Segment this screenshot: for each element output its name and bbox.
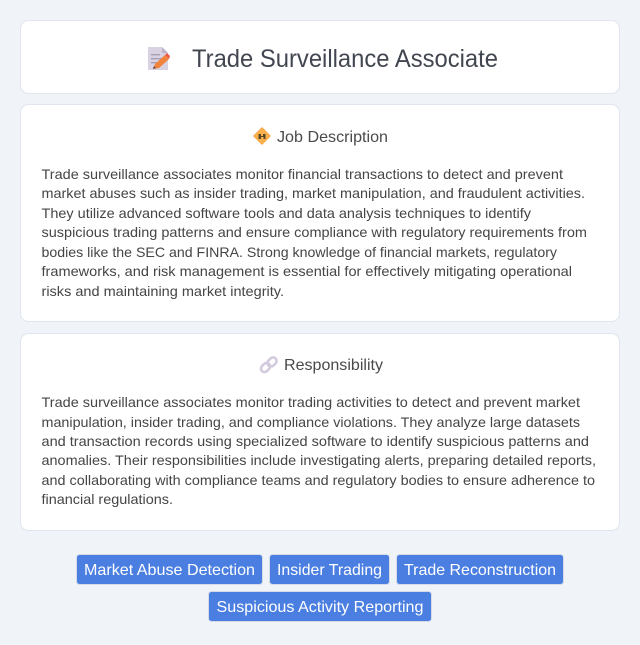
text block: responsibility <box>42 394 596 507</box>
icon: memo with pencil <box>148 47 170 70</box>
tag: trade reconstruction: Trade Reconstruction <box>404 562 556 579</box>
text block: job description: suspicious trading patterns and ensure compliance with regulatory requirements from <box>42 224 587 240</box>
text block: job description: Trade surveillance associates monitor financial transactions to detect and prevent <box>42 166 563 182</box>
tag: market abuse detection <box>76 554 262 584</box>
text block: job description: They utilize advanced software tools and data analysis techniques to identify <box>42 205 531 221</box>
icon: warning diamond <box>254 128 270 144</box>
text block: responsibility: and collaborating with compliance teams and regulatory bodies to ensure adherence to <box>42 472 595 488</box>
title: Trade Surveillance Associate <box>192 45 498 73</box>
text block: job description: market abuses such as insider trading, market manipulation, and fraudulent activities. <box>42 185 585 201</box>
tag: suspicious activity reporting <box>208 592 432 622</box>
text block: responsibility: anomalies. Their responsibilities include investigating alerts, preparing detailed reports, <box>42 452 596 468</box>
tag: insider trading: Insider Trading <box>277 562 382 579</box>
panel: responsibility <box>20 334 620 530</box>
text block: responsibility: Trade surveillance associates monitor trading activities to detect and prevent market <box>42 394 580 410</box>
tag: insider trading <box>270 554 390 584</box>
heading: job description: Job Description <box>277 129 388 146</box>
text block: job description: bodies like the SEC and FINRA. Strong knowledge of financial markets, regulatory <box>42 244 557 260</box>
tag: suspicious activity reporting: Suspicious Activity Reporting <box>216 599 424 616</box>
panel: job description <box>20 104 620 322</box>
text block: job description: frameworks, and risk management is essential for effectively mitigating operational <box>42 263 572 279</box>
text block: job description <box>42 166 587 299</box>
text block: job description: risks and maintaining market integrity. <box>42 283 284 299</box>
icon: chain link <box>259 356 278 374</box>
tag: trade reconstruction <box>396 554 564 584</box>
text block: responsibility: and transaction records using specialized software to identify suspicious patterns and <box>42 433 589 449</box>
panel: title card <box>20 20 620 94</box>
tag: market abuse detection: Market Abuse Detection <box>84 562 255 579</box>
text block: responsibility: manipulation, insider trading, and compliance violations. They analyze large datasets <box>42 414 580 430</box>
text block: responsibility: financial regulations. <box>42 491 173 507</box>
skill tags <box>76 554 564 622</box>
heading: responsibility: Responsibility <box>284 357 383 374</box>
